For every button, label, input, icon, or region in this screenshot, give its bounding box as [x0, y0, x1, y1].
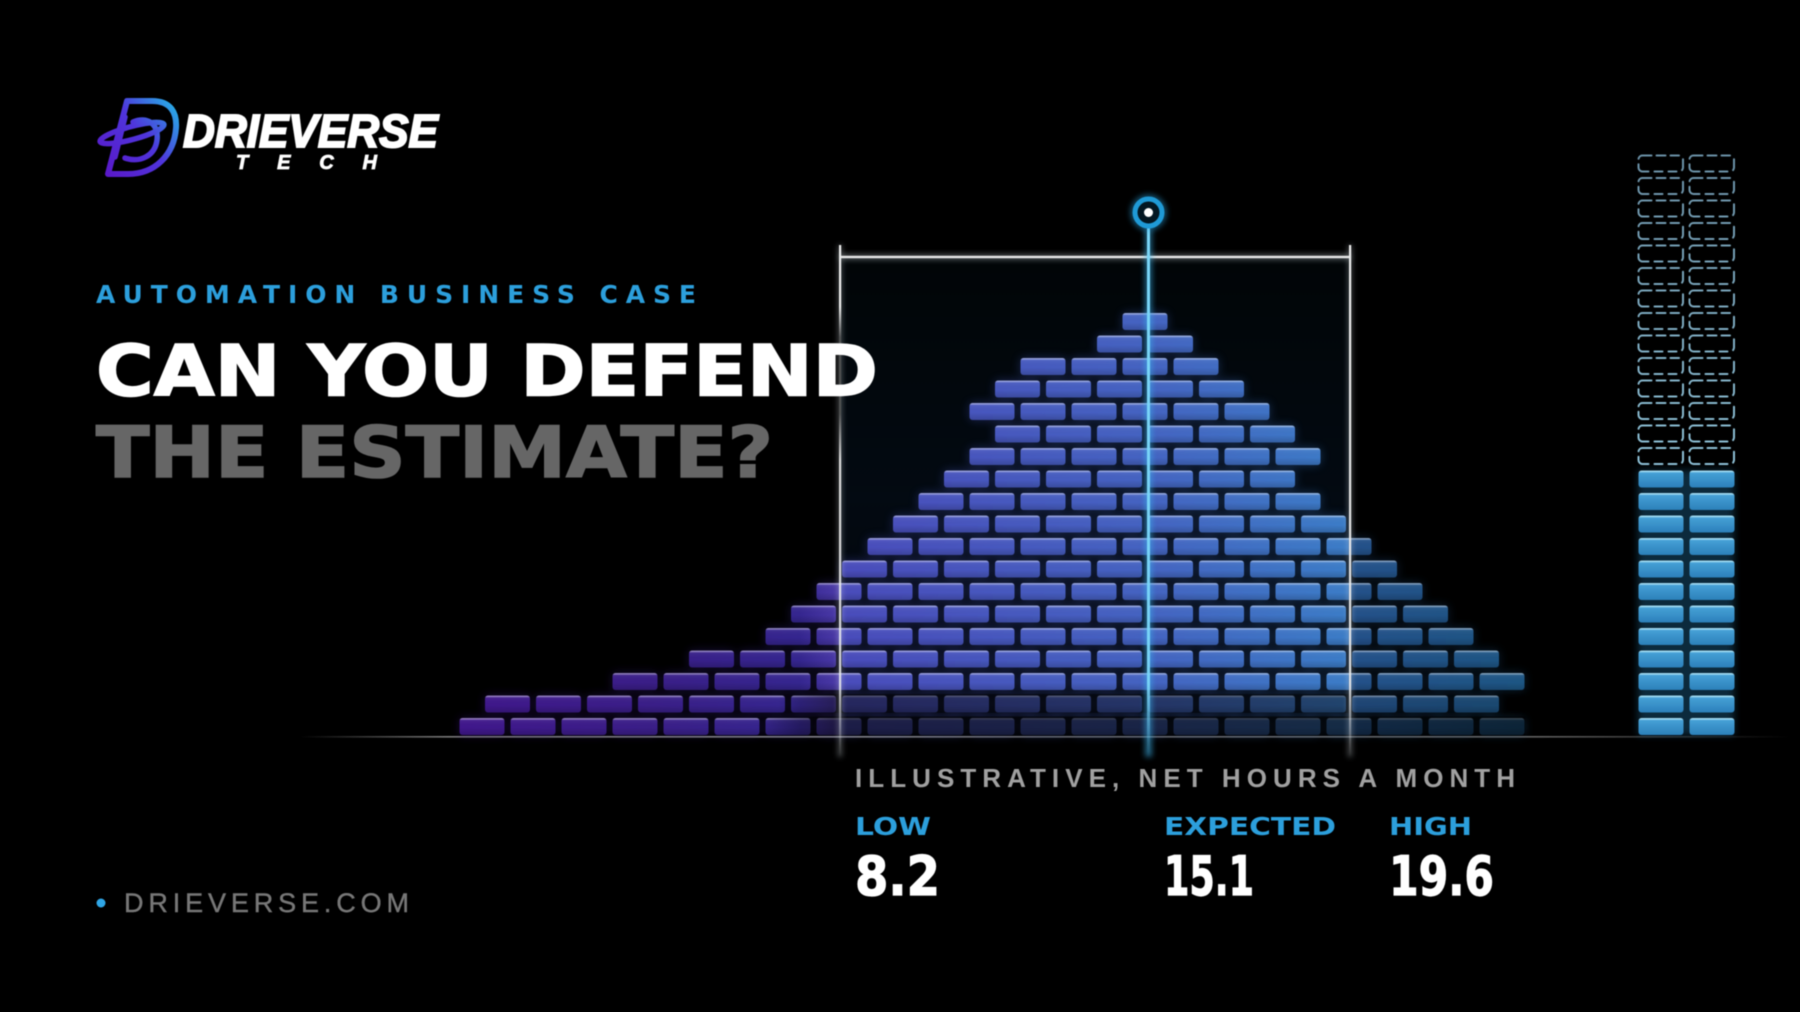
marker circle: [1134, 198, 1164, 228]
headline line 1: CAN YOU DEFEND: [96, 330, 878, 412]
logo wordmark: DRIEVERSE: [183, 105, 439, 157]
baseline: [300, 736, 1790, 738]
bracket interior panel: [841, 258, 1350, 737]
logo subline: TECH: [236, 152, 378, 174]
headline line 2: THE ESTIMATE?: [96, 412, 773, 494]
stat: high: 19.6: [1389, 845, 1494, 908]
eyebrow: AUTOMATION BUSINESS CASE: [96, 280, 696, 309]
stat: high: [1389, 812, 1494, 908]
expected marker line: [1134, 198, 1164, 757]
stat: low: [855, 812, 940, 908]
bullet: [96, 898, 106, 908]
range bracket: low to high: [839, 245, 1351, 757]
solid bricks glow: [1638, 470, 1734, 735]
stat: low: 8.2: [855, 845, 940, 908]
chart caption: ILLUSTRATIVE, NET HOURS A MONTH: [855, 763, 1515, 793]
stat: expected: EXPECTED: [1164, 812, 1336, 841]
stat: low: LOW: [855, 812, 931, 841]
stat: high: HIGH: [1389, 812, 1472, 841]
footer: website: [96, 888, 409, 918]
stat: expected: [1164, 812, 1336, 908]
url: DRIEVERSE.COM: [124, 888, 409, 918]
chart: brick distribution: [459, 313, 1525, 736]
logo: [98, 101, 439, 174]
icon: D with ringed planet: [98, 101, 176, 174]
dashed capacity bricks: [1638, 156, 1734, 464]
stat: expected: 15.1: [1164, 845, 1254, 908]
solid delivered bricks: [1638, 470, 1734, 735]
stacked capacity columns: [1638, 156, 1734, 735]
